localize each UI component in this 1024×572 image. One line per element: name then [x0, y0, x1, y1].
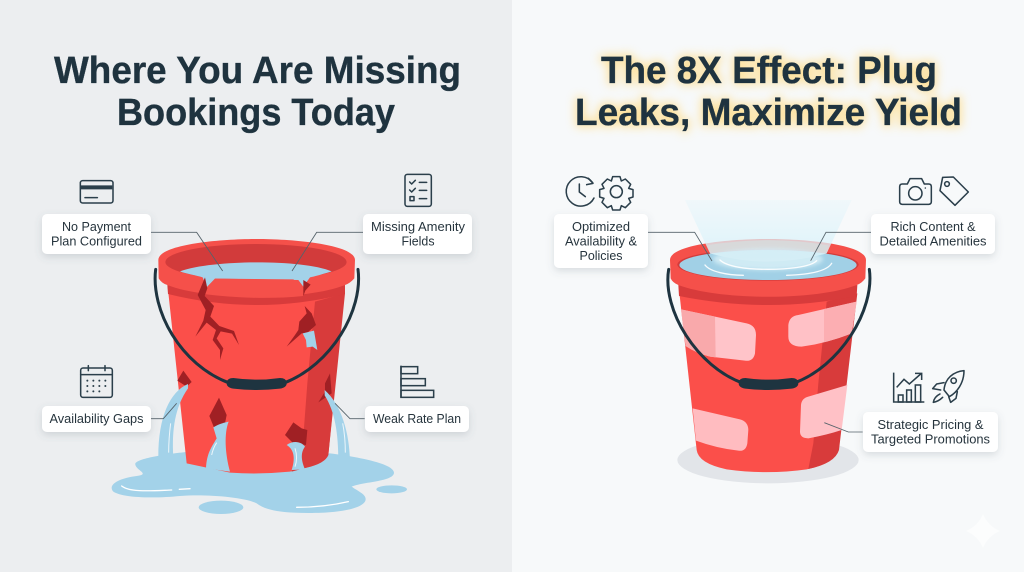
panel: left background: [0, 0, 512, 572]
bucket inner wall: [165, 244, 347, 280]
bucket body: [167, 283, 345, 473]
icon: rocket: [933, 371, 964, 402]
water surface: [180, 262, 332, 287]
bucket lower band: [678, 285, 857, 305]
heading glow: right title: Leaks, Maximize Yield: [575, 92, 962, 134]
bucket shaded side: [808, 293, 857, 469]
icon: horizontal bar chart: [401, 366, 434, 398]
left and right side streams: [158, 384, 350, 461]
callout: optimized availability: Optimized: [572, 220, 630, 234]
callout: strategic pricing: [863, 412, 998, 452]
callout: weak rate plan: [365, 406, 469, 432]
callout: optimized availability: Policies: [580, 249, 622, 263]
callout: weak rate plan: Weak Rate Plan: [373, 412, 461, 426]
light beam: [685, 200, 852, 262]
patch: upper right: [788, 302, 857, 347]
icon: calendar: [81, 366, 112, 397]
callout: rich content: Rich Content &: [890, 220, 976, 234]
water glow: [713, 249, 823, 270]
callout: no payment plan: Plan Configured: [51, 234, 142, 248]
callout: missing amenity fields: Fields: [402, 234, 434, 248]
crack: middle left and right holes: [177, 371, 332, 445]
rim edge under water: [203, 279, 303, 298]
icon: clock: [566, 177, 594, 206]
icon: price tag: [940, 177, 968, 205]
callout: availability gaps: [42, 406, 151, 432]
bucket rim: [158, 239, 355, 297]
illustration: leaking bucket: [80, 174, 434, 514]
panel: right background: [512, 0, 1024, 572]
icon: camera: [900, 179, 931, 204]
heading: left title: Bookings Today: [117, 92, 395, 134]
bucket handle: [155, 269, 359, 383]
leader lines: [151, 232, 365, 419]
callout: no payment plan: [42, 214, 151, 254]
rim back faded: [707, 240, 828, 253]
heading: left title: [54, 50, 461, 134]
patch: lower right: [800, 385, 847, 438]
callout: rich content: Detailed Amenities: [880, 234, 986, 248]
callout: availability gaps: Availability Gaps: [50, 412, 144, 426]
icon: gear: [600, 177, 633, 210]
handle grip: [739, 378, 798, 390]
bucket handle: [668, 269, 870, 383]
puddle: [112, 452, 407, 514]
bucket lower band: [167, 285, 345, 305]
bucket shaded side: [292, 293, 345, 472]
callout: strategic pricing: Targeted Promotions: [871, 432, 990, 446]
bucket body: [678, 283, 857, 472]
icon: credit card: [80, 181, 113, 203]
callout: rich content: [871, 214, 995, 254]
heading: left title: Where You Are Missing: [54, 50, 461, 92]
callout: optimized availability: [554, 214, 648, 268]
heading glow: right title: [575, 50, 962, 134]
front streams: [206, 422, 305, 472]
callout: missing amenity fields: Missing Amenity: [371, 220, 466, 234]
heading: right title: [575, 50, 962, 134]
bucket inner wall: [677, 249, 859, 281]
crack: upper left: [195, 277, 239, 360]
heading: right title: The 8X Effect: Plug: [601, 50, 937, 92]
callout: optimized availability: Availability &: [565, 234, 638, 248]
patch: lower left: [693, 408, 748, 451]
ground shadow: [677, 437, 859, 483]
crack: upper right: [287, 280, 317, 350]
water surface: [679, 250, 857, 280]
icon: growth chart: [894, 373, 924, 402]
heading: right title: Leaks, Maximize Yield: [575, 92, 962, 134]
callout: missing amenity fields: [363, 214, 472, 254]
callout: no payment plan: No Payment: [62, 220, 132, 234]
leader lines: [648, 232, 871, 432]
callout: strategic pricing: Strategic Pricing &: [878, 418, 984, 432]
water ripples: [705, 260, 832, 275]
handle grip: [227, 378, 287, 390]
icon: sparkle watermark: [966, 514, 1000, 548]
illustration: patched bucket: [566, 177, 968, 483]
patch: upper left: [681, 309, 756, 361]
bucket rim: [670, 239, 866, 297]
heading glow: right title: The 8X Effect: Plug: [601, 50, 937, 92]
icon: checklist: [405, 174, 431, 206]
